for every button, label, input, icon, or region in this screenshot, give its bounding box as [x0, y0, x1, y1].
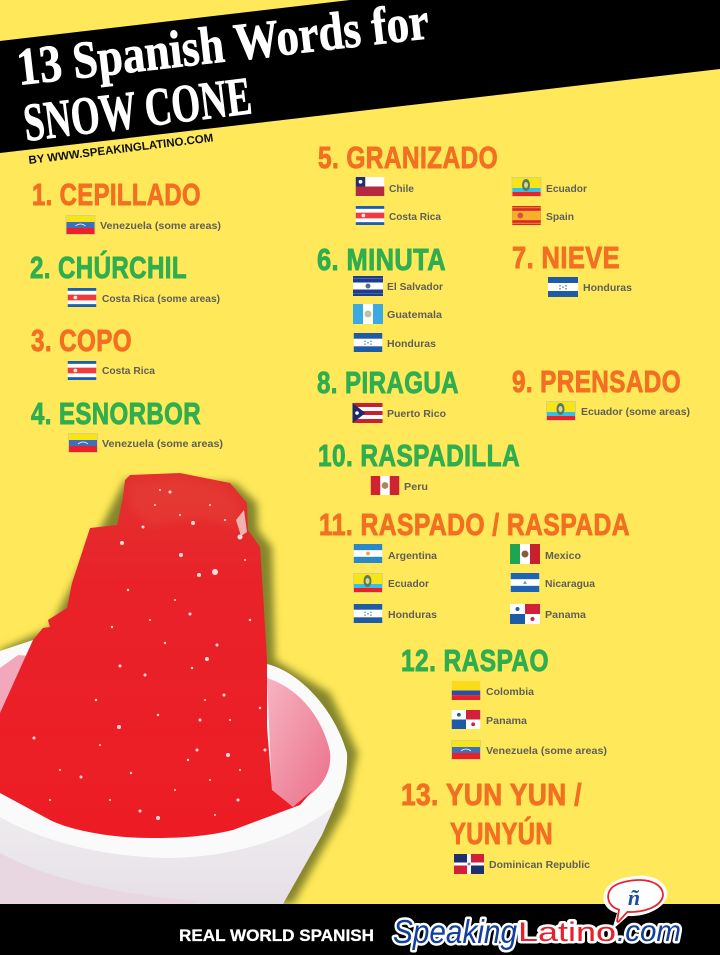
heading: 11. RASPADO / RASPADA: [319, 507, 630, 542]
label: El Salvador: [387, 281, 443, 293]
flag: Costa Rica: [68, 288, 96, 307]
flag: Mexico: [510, 544, 540, 564]
word 13: [401, 777, 590, 874]
footer bar: [0, 876, 720, 955]
label: Nicaragua: [545, 578, 595, 590]
heading: 5. GRANIZADO: [318, 140, 498, 175]
label: Dominican Republic: [489, 859, 590, 871]
flag: Nicaragua: [511, 573, 539, 592]
label: Venezuela (some areas): [486, 745, 607, 757]
label: Costa Rica (some areas): [102, 293, 220, 305]
flag: Dominican Republic: [454, 854, 484, 874]
cup band: [0, 805, 335, 904]
ice texture: [130, 479, 240, 526]
tagline: REAL WORLD SPANISH: [179, 926, 374, 945]
label: Chile: [389, 183, 414, 195]
flag: Honduras: [354, 333, 382, 352]
cup: [0, 640, 347, 904]
flag: Ecuador: [546, 401, 576, 421]
logo word com: .com: [617, 915, 681, 948]
label: Ecuador: [546, 183, 587, 195]
label: Honduras: [583, 282, 632, 294]
flag: Honduras: [548, 277, 578, 297]
cup lower body: [0, 853, 200, 904]
label: Venezuela (some areas): [102, 438, 223, 450]
label: Colombia: [486, 686, 534, 698]
label: Mexico: [545, 550, 581, 562]
flag: Panama: [452, 710, 480, 729]
flag: Costa Rica: [356, 206, 384, 225]
flag: Costa Rica: [68, 361, 96, 380]
flag: Argentina: [354, 544, 382, 563]
label: Costa Rica: [389, 211, 441, 223]
heading: 3. COPO: [31, 323, 132, 358]
logo: [393, 876, 681, 950]
heading: 10. RASPADILLA: [318, 438, 520, 473]
label: Honduras: [388, 609, 437, 621]
heading line 2: YUNYÚN: [450, 815, 553, 851]
label: Argentina: [388, 550, 437, 562]
word 12: [401, 643, 607, 760]
flag: Venezuela: [66, 215, 96, 235]
label: Panama: [545, 609, 586, 621]
word 7: [512, 240, 632, 297]
word 11: [319, 507, 630, 624]
cup and ice shadow: [0, 480, 358, 904]
heading: 6. MINUTA: [317, 242, 446, 277]
snow cone photo: [0, 473, 358, 904]
label: Costa Rica: [102, 365, 155, 377]
logo word Speaking: Speaking: [393, 913, 518, 950]
label: Honduras: [387, 338, 436, 350]
heading: 2. CHÚRCHIL: [30, 249, 187, 285]
flag: Venezuela: [451, 740, 481, 760]
label: Panama: [486, 715, 527, 727]
label: Guatemala: [387, 309, 442, 321]
flag: Honduras: [354, 604, 382, 623]
cup interior right: [267, 678, 330, 807]
flag: Guatemala: [353, 304, 383, 324]
word 5: [318, 140, 587, 225]
cup interior left: [0, 655, 30, 715]
flag: Chile: [356, 177, 384, 196]
label: Puerto Rico: [387, 408, 446, 420]
label: Venezuela (some areas): [100, 220, 221, 232]
word 2: [30, 249, 220, 307]
flag: Colombia: [452, 681, 480, 700]
logo word Latino: Latino: [518, 917, 616, 947]
ice speckles: [32, 489, 266, 820]
word 9: [512, 364, 690, 421]
flag: Ecuador: [512, 177, 542, 197]
flag: Panama: [510, 604, 540, 624]
label: Ecuador (some areas): [581, 406, 690, 418]
heading: 8. PIRAGUA: [317, 365, 459, 400]
label: Peru: [404, 481, 428, 493]
logo speech bubble: [604, 876, 667, 930]
logo speech bubble: ñ: [628, 885, 640, 910]
heading: 7. NIEVE: [512, 240, 620, 275]
flag: El Salvador: [353, 276, 383, 296]
heading: 12. RASPAO: [401, 643, 549, 678]
word 6: [317, 242, 446, 352]
flag: Venezuela: [68, 433, 98, 453]
word 4: [31, 396, 223, 453]
word 10: [318, 438, 520, 495]
shaved ice: [0, 473, 313, 838]
flag: Peru: [371, 476, 399, 495]
heading: 1. CEPILLADO: [32, 177, 201, 212]
flag: Spain: [512, 206, 541, 225]
word 1: [32, 177, 221, 235]
ice highlight: [236, 510, 247, 536]
word 3: [31, 323, 155, 380]
flag: Ecuador: [353, 573, 383, 593]
title line 2: SNOW CONE: [20, 65, 255, 153]
byline: BY WWW.SPEAKINGLATINO.COM: [28, 132, 214, 167]
flag: Puerto Rico: [352, 403, 382, 423]
title banner: [0, 0, 720, 153]
heading line 1: 13. YUN YUN /: [401, 777, 582, 812]
heading: 4. ESNORBOR: [31, 396, 201, 431]
label: Ecuador: [388, 578, 429, 590]
word 8: [317, 365, 459, 423]
label: Spain: [546, 211, 574, 223]
